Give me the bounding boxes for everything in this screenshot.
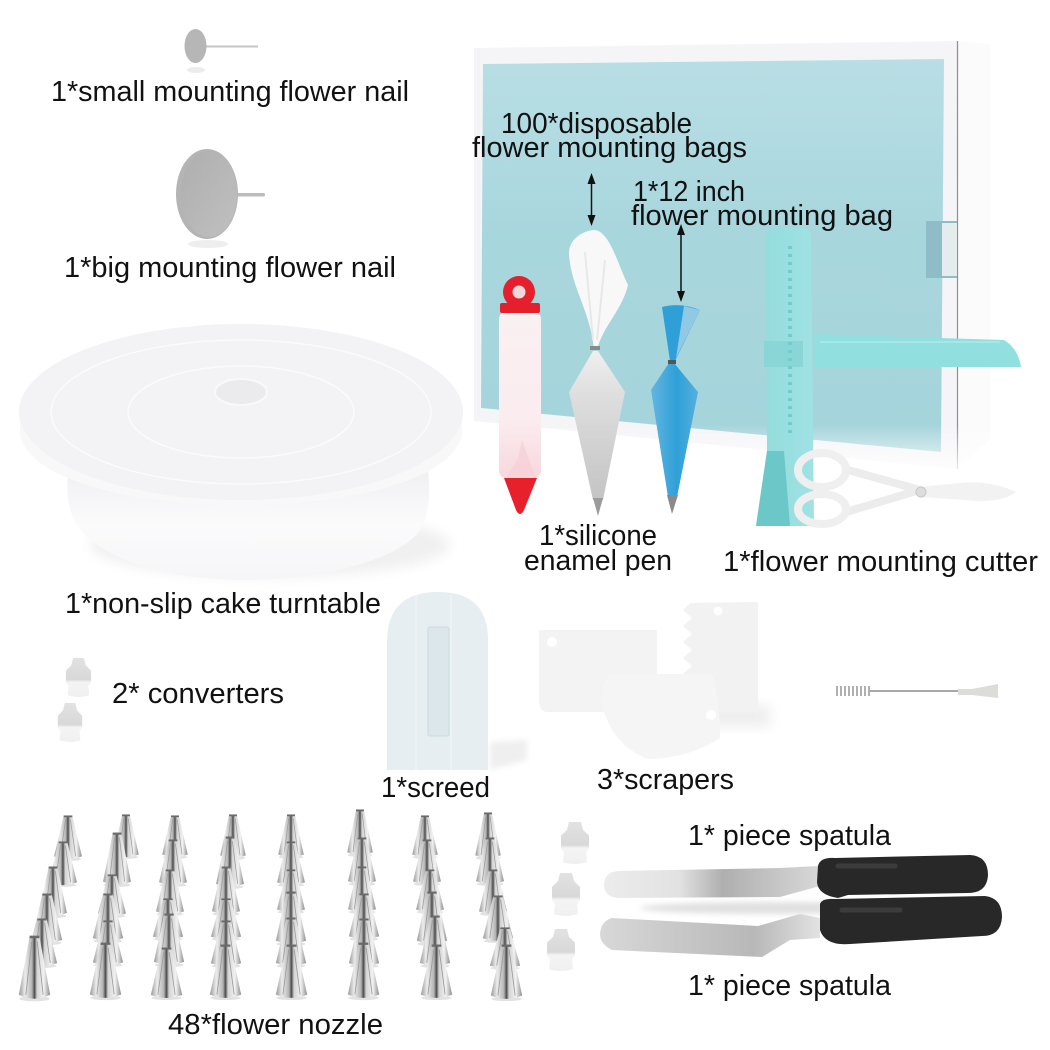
nozzle column 5	[276, 815, 307, 1000]
label: small nail: 1*small mounting flower nail	[51, 76, 409, 108]
icon: 48 piping nozzles	[19, 810, 522, 1001]
label: disposable bags: flower mounting bags	[472, 132, 747, 164]
nozzle column 8	[475, 813, 522, 1001]
label: big nail: 1*big mounting flower nail	[64, 252, 396, 284]
icon: disposable piping bag	[569, 230, 628, 516]
label: screed: 1*screed	[381, 772, 490, 804]
label: silicone pen: enamel pen	[524, 545, 672, 577]
icon: cake turntable	[19, 324, 463, 580]
label: disposable bags: 100*disposable	[501, 108, 692, 140]
nozzle column 2	[90, 815, 139, 1000]
nozzle column 4	[210, 815, 246, 1000]
icon: flower lifter scissors	[798, 453, 1016, 524]
label: bottom spatula: 1* piece spatula	[688, 970, 892, 1002]
icon: three converters	[547, 822, 589, 971]
label: nozzles: 48*flower nozzle	[168, 1009, 383, 1041]
nozzle column 1	[19, 816, 82, 1001]
arrow: disposable bags	[588, 173, 596, 226]
label: 12 inch bag	[631, 176, 893, 232]
label: converters: 2* converters	[112, 678, 284, 710]
icon: adjustable flower mounting cutter	[756, 228, 1021, 526]
nozzle column 6	[347, 810, 379, 1000]
icon: straight spatula	[604, 855, 988, 914]
arrow: 12 inch bag	[677, 224, 685, 302]
label: cutter: 1*flower mounting cutter	[723, 546, 1038, 578]
icon: small flower nail	[184, 29, 258, 73]
icon: big flower nail	[176, 149, 265, 248]
label: silicone pen: 1*silicone	[539, 520, 657, 552]
label: silicone pen	[524, 520, 672, 577]
label: 12 inch bag: 1*12 inch	[633, 176, 745, 208]
icon: three scrapers	[539, 602, 770, 759]
icon: silicone enamel pen	[499, 276, 541, 514]
nozzle column 3	[151, 816, 188, 1000]
icon: cleaning brush	[836, 684, 998, 698]
label: top spatula: 1* piece spatula	[688, 820, 892, 852]
nozzle column 7	[412, 816, 452, 1000]
label: turntable: 1*non-slip cake turntable	[65, 588, 381, 620]
panel: packaging box	[470, 41, 995, 480]
icon: screed	[387, 592, 527, 770]
label: disposable bags	[472, 108, 747, 164]
icon: two converters	[58, 658, 91, 742]
icon: offset spatula	[600, 896, 1002, 957]
label: scrapers: 3*scrapers	[597, 764, 734, 796]
label: 12 inch bag: flower mounting bag	[631, 200, 893, 232]
icon: 12 inch blue piping bag	[651, 305, 700, 514]
